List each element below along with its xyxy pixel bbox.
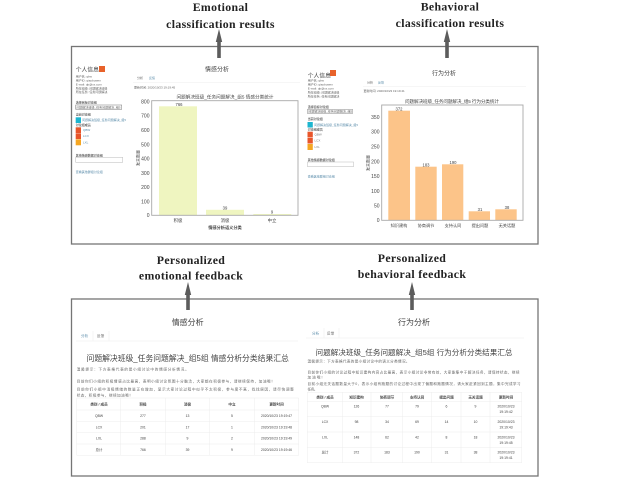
feedback table: 类别 / 成员 xyxy=(316,394,334,400)
sidebar: behavioral personal info: 所在任务: 任务问题解决 xyxy=(308,94,339,98)
feedback: emotional summary: 情感分析 xyxy=(172,317,204,327)
bar chart: behavioral classes: 300 xyxy=(371,130,380,136)
sidebar: emotional personal info: 所在任务: 任务问题解决 xyxy=(76,89,107,94)
feedback table: 766 xyxy=(140,448,146,452)
feedback table: 19:19:45 xyxy=(499,441,513,445)
feedback table: QBW xyxy=(321,404,330,408)
feedback table: 8 xyxy=(446,436,448,440)
feedback table: 183 xyxy=(384,450,390,454)
feedback table: 31 xyxy=(445,450,448,454)
label: emotional classification results xyxy=(166,0,275,31)
bar chart: emotional classes: 300 xyxy=(141,171,150,177)
sidebar: behavioral personal info: 讨论组成员 xyxy=(308,126,323,132)
heading: emotional analysis: 反馈 xyxy=(149,75,155,80)
feedback table: 10 xyxy=(474,420,477,424)
sidebar: emotional personal info: 选择目标讨论组 xyxy=(76,100,97,104)
feedback table: 13 xyxy=(186,414,189,418)
bar chart: behavioral classes: 31 xyxy=(478,207,483,212)
heading: emotional analysis xyxy=(133,66,300,90)
bar chart: behavioral classes: 100 xyxy=(371,189,380,195)
feedback table: 62 xyxy=(385,436,389,440)
bar chart: behavioral classes: 372 xyxy=(396,106,403,112)
bar chart: emotional classes: 800 xyxy=(141,100,150,106)
bar chart: emotional classes: 766 xyxy=(176,102,183,107)
feedback notes: 目前小组无关话题数量大于0，表示小组有跑题的讨论过程中出现了偏题和跑题情况，请大家赶紧回到主题，集中完成学习 xyxy=(308,381,521,386)
label: behavioral classification results: classification results xyxy=(396,16,504,30)
heading: emotional analysis: 更新时间: 2020/10/23 19:19:45 xyxy=(134,84,176,90)
sidebar: behavioral personal info: E-mail: qb@xx.com xyxy=(308,86,334,90)
bar chart: emotional classes xyxy=(134,94,298,231)
feedback table: 2020/10/23 xyxy=(498,436,515,440)
feedback table: 无关话题 xyxy=(468,394,483,400)
sidebar: behavioral personal info: 当前讨论组 xyxy=(308,116,323,121)
feedback table: 1 xyxy=(231,426,233,430)
bars xyxy=(388,111,517,220)
sidebar: emotional personal info: 问题解决班级_任务问题解决_组5 xyxy=(76,104,121,109)
sidebar: emotional personal info: 用户名: qbw xyxy=(76,74,93,78)
bar chart: emotional classes: 0 xyxy=(147,213,150,219)
bar chart: emotional classes: 100 xyxy=(141,200,150,206)
sidebar: emotional personal info: 当前讨论组 xyxy=(76,112,91,116)
sidebar: emotional personal info: E-mail: qb@xx.com xyxy=(76,82,102,86)
bar chart: behavioral classes: 200 xyxy=(371,159,380,165)
sidebar: behavioral personal info: QBW xyxy=(314,132,322,136)
feedback table: 288 xyxy=(140,437,146,441)
feedback title: 问题解决班级_任务问题解决_组5组 行为分析分类结果汇总 xyxy=(315,347,513,357)
feedback table: 38 xyxy=(474,450,477,454)
sidebar: behavioral personal info: 个人信息 xyxy=(308,72,331,80)
bar chart: behavioral classes: 250 xyxy=(371,144,380,150)
label: emotional classification results: classification results xyxy=(166,17,275,31)
feedback table: 77 xyxy=(385,404,389,408)
feedback table: QBW xyxy=(95,414,104,418)
feedback: emotional summary: 反馈 xyxy=(97,333,105,338)
sidebar: emotional personal info: 讨论组成员 xyxy=(76,122,91,127)
feedback table: 2020/10/23 xyxy=(498,404,515,408)
bar chart: emotional classes: 9 xyxy=(271,210,274,214)
label: personalized behavioral feedback: behavioral feedback xyxy=(358,267,466,281)
feedback table: LCX xyxy=(96,426,103,430)
bar chart: behavioral classes xyxy=(364,98,523,229)
feedback table: 69 xyxy=(415,420,419,424)
bar chart: emotional classes: 发言数量 xyxy=(134,150,140,166)
feedback notes: 温馨提示：下方表格代表的是小组讨论中的情感分析情况。 xyxy=(77,366,189,371)
feedback table: 148 xyxy=(354,436,359,440)
heading: behavioral analysis xyxy=(363,70,526,93)
panel: personalized feedback xyxy=(72,299,538,476)
label: behavioral classification results xyxy=(396,0,504,30)
bar chart: behavioral classes: 知识建构 xyxy=(391,222,407,229)
sidebar: behavioral personal info: 其他情感数据讨论组 xyxy=(308,157,335,162)
feedback notes: 温馨提示：下方表格代表的是小组讨论中的语义分类情况。 xyxy=(308,358,410,364)
bar chart: behavioral classes: 协商调节 xyxy=(418,222,434,229)
feedback table: 6 xyxy=(446,404,448,408)
sidebar: emotional personal info: 查看其他群组讨论组 xyxy=(76,169,103,174)
feedback table: 9 xyxy=(231,448,233,452)
heading: emotional analysis: 分析 xyxy=(137,75,143,80)
feedback table: 更新时间 xyxy=(499,394,514,400)
sidebar: behavioral personal info: LCX xyxy=(314,138,320,142)
sidebar: behavioral personal info: 查看其他群组讨论组 xyxy=(308,174,335,178)
label: personalized behavioral feedback: Personalized xyxy=(378,251,446,265)
bar chart: behavioral classes: 38 xyxy=(505,205,510,210)
feedback table: 类别 / 成员 xyxy=(90,402,108,406)
sidebar: emotional personal info: QBW xyxy=(83,128,90,132)
feedback: behavioral summary: 分析 xyxy=(312,330,320,336)
feedback table: 2 xyxy=(231,437,233,441)
bar chart: emotional classes: 39 xyxy=(223,205,228,210)
arrow: to behavioral classification results xyxy=(444,29,450,58)
feedback table xyxy=(307,392,522,463)
feedback table xyxy=(77,398,299,455)
feedback table: 总计 xyxy=(96,447,103,452)
feedback table: 2020/10/23 xyxy=(498,420,515,424)
feedback table: 372 xyxy=(354,450,359,454)
feedback notes: 目前你们小组的讨论过程中知识建构内容占比最高，表示小组讨论非常有效，大家能集中于解决任务，请保持状态，继续 xyxy=(308,370,520,374)
bar chart: behavioral classes: 50 xyxy=(374,204,380,210)
bar chart: behavioral classes: 183 xyxy=(422,162,430,168)
sidebar: emotional personal info: 用户ID: qiaobowen xyxy=(76,78,101,82)
feedback table: 中立 xyxy=(228,402,236,406)
feedback table: 2020/10/23 19:19:48 xyxy=(261,426,292,430)
bar chart: emotional classes: 400 xyxy=(141,157,150,163)
label: emotional classification results: Emotional xyxy=(193,0,249,14)
feedback table: 79 xyxy=(415,404,419,408)
label: personalized behavioral feedback xyxy=(358,251,466,281)
sidebar: emotional personal info: 所在班级: 问题解决班级 xyxy=(76,86,107,90)
feedback table: 消极 xyxy=(184,402,191,406)
bar chart: behavioral classes: 无关话题 xyxy=(499,222,516,229)
heading: behavioral analysis: 分析 xyxy=(367,80,373,84)
sidebar: emotional personal info: LXL xyxy=(83,140,89,144)
bar chart: behavioral classes: 提出问题 xyxy=(472,222,489,229)
feedback table: 2020/10/23 xyxy=(498,450,515,454)
feedback table: 5 xyxy=(231,414,233,418)
feedback table: 98 xyxy=(355,420,358,424)
feedback table: 总计 xyxy=(322,450,329,454)
bar chart: behavioral classes: 发言数量 xyxy=(364,155,370,171)
bar chart: behavioral classes: 150 xyxy=(371,174,380,180)
feedback table: LXL xyxy=(322,436,328,440)
sidebar: emotional personal info: LCX xyxy=(83,134,89,138)
feedback table: LCX xyxy=(322,420,329,424)
heading: behavioral analysis: 更新时间: 2020/10/23 19:19:41 xyxy=(364,88,405,93)
panel: classification results xyxy=(72,46,538,244)
feedback table: 18 xyxy=(474,436,477,440)
feedback table: 277 xyxy=(140,414,146,418)
bar chart: behavioral classes: 问题解决班级_任务问题解决_组5 行为分类统计 xyxy=(405,98,499,105)
sidebar: behavioral personal info: 选择目标讨论组 xyxy=(308,104,329,109)
feedback table: 19:19:41 xyxy=(499,456,513,460)
feedback table: 19:19:43 xyxy=(499,426,513,430)
feedback notes xyxy=(308,358,521,392)
feedback table: 9 xyxy=(187,437,189,441)
bar chart: emotional classes: 500 xyxy=(141,142,150,148)
feedback notes: 状态，积极参与，继续加油哦！ xyxy=(77,392,133,398)
feedback: behavioral summary: 行为分析 xyxy=(398,317,430,327)
sidebar: behavioral personal info: 问题解决班级_任务问题解决_组5 xyxy=(314,122,358,127)
sidebar: behavioral personal info: LXL xyxy=(314,145,320,149)
feedback: emotional summary xyxy=(76,317,299,455)
bar chart: emotional classes: 中立 xyxy=(268,217,277,224)
feedback table: 34 xyxy=(385,420,389,424)
bar chart: emotional classes: 700 xyxy=(141,114,150,120)
bar chart: emotional classes: 消极 xyxy=(221,217,230,224)
sidebar: emotional personal info: 其他情感数据讨论组 xyxy=(76,152,103,158)
feedback notes xyxy=(77,366,294,398)
feedback table: LXL xyxy=(96,437,102,441)
heading: emotional analysis: 情感分析 xyxy=(205,66,229,74)
arrow: to personalized behavioral feedback xyxy=(409,282,415,310)
arrow: to emotional classification results xyxy=(216,29,222,58)
sidebar: emotional personal info: 个人信息 xyxy=(76,66,99,74)
feedback table: 39 xyxy=(186,448,189,452)
feedback table: 积极 xyxy=(139,402,147,406)
sidebar: behavioral personal info: 问题解决班级_任务问题解决_组5 xyxy=(308,108,353,114)
feedback notes: 任务。 xyxy=(308,386,318,392)
bar chart: emotional classes: 情感分析语义分类 xyxy=(208,224,243,231)
arrow: to personalized emotional feedback xyxy=(185,282,191,310)
feedback table: 知识建构 xyxy=(349,394,364,400)
feedback table: 126 xyxy=(354,404,359,408)
feedback title: 问题解决班级_任务问题解决_组5组 情感分析分类结果汇总 xyxy=(87,353,289,363)
label: personalized emotional feedback xyxy=(139,253,243,282)
bar chart: behavioral classes: 190 xyxy=(450,160,457,165)
sidebar: emotional personal info xyxy=(76,66,126,174)
feedback table: 19:19:42 xyxy=(499,410,513,414)
feedback: behavioral summary xyxy=(306,317,524,463)
feedback table: 9 xyxy=(475,404,477,408)
bar chart: emotional classes: 200 xyxy=(141,185,150,191)
bar chart: behavioral classes: 350 xyxy=(371,115,380,121)
feedback notes: 目前你们小组中消极情绪的数量正在增加，显示大家讨论过程中似乎不太积极，参与度不高，找找原因，请尽快调整 xyxy=(77,386,294,392)
feedback table: 2020/10/23 19:19:46 xyxy=(261,448,292,452)
feedback table: 2020/10/23 19:19:49 xyxy=(261,437,292,441)
label: personalized emotional feedback: Personalized xyxy=(157,253,225,267)
feedback table: 支持认同 xyxy=(410,394,425,400)
heading: behavioral analysis: 反馈 xyxy=(378,80,384,84)
feedback table: 190 xyxy=(414,450,420,454)
sidebar: behavioral personal info: 所在班级: 问题解决班级 xyxy=(308,90,339,94)
sidebar: emotional personal info: 问题解决班级_任务问题解决_组5 xyxy=(82,117,126,122)
sidebar: behavioral personal info: 用户ID: qiaobowen xyxy=(308,82,333,86)
heading: behavioral analysis: 行为分析 xyxy=(432,70,456,78)
feedback table: 42 xyxy=(415,436,419,440)
feedback: behavioral summary: 反馈 xyxy=(327,330,335,336)
feedback table: 协商调节 xyxy=(380,394,395,400)
label: personalized emotional feedback: emotional feedback xyxy=(139,268,243,282)
feedback notes: 加油哦! xyxy=(308,374,322,380)
feedback notes: 目前你们小组的积极情感占比最高，表明小组讨论氛围十分融洽，大家都在积极参与，请继续保持，加油哦！ xyxy=(77,378,275,384)
sidebar: behavioral personal info xyxy=(308,70,358,178)
bar chart: emotional classes: 问题解决班级_任务问题解决_组5 情感分类统计 xyxy=(176,94,274,101)
feedback table: 提出问题 xyxy=(439,394,454,400)
feedback: emotional summary: 分析 xyxy=(81,333,89,338)
feedback table: 14 xyxy=(445,420,448,424)
bars xyxy=(159,106,291,215)
sidebar: behavioral personal info: 用户名: qbw xyxy=(308,78,325,82)
feedback table: 2020/10/23 19:19:47 xyxy=(261,414,292,418)
feedback table: 17 xyxy=(186,426,189,430)
bar chart: behavioral classes: 0 xyxy=(377,218,380,224)
bar chart: behavioral classes: 支持认同 xyxy=(445,222,461,229)
feedback table: 201 xyxy=(140,426,146,430)
bar chart: emotional classes: 600 xyxy=(141,128,150,134)
bar chart: emotional classes: 积极 xyxy=(174,217,183,224)
feedback table: 更新时间 xyxy=(269,402,284,406)
